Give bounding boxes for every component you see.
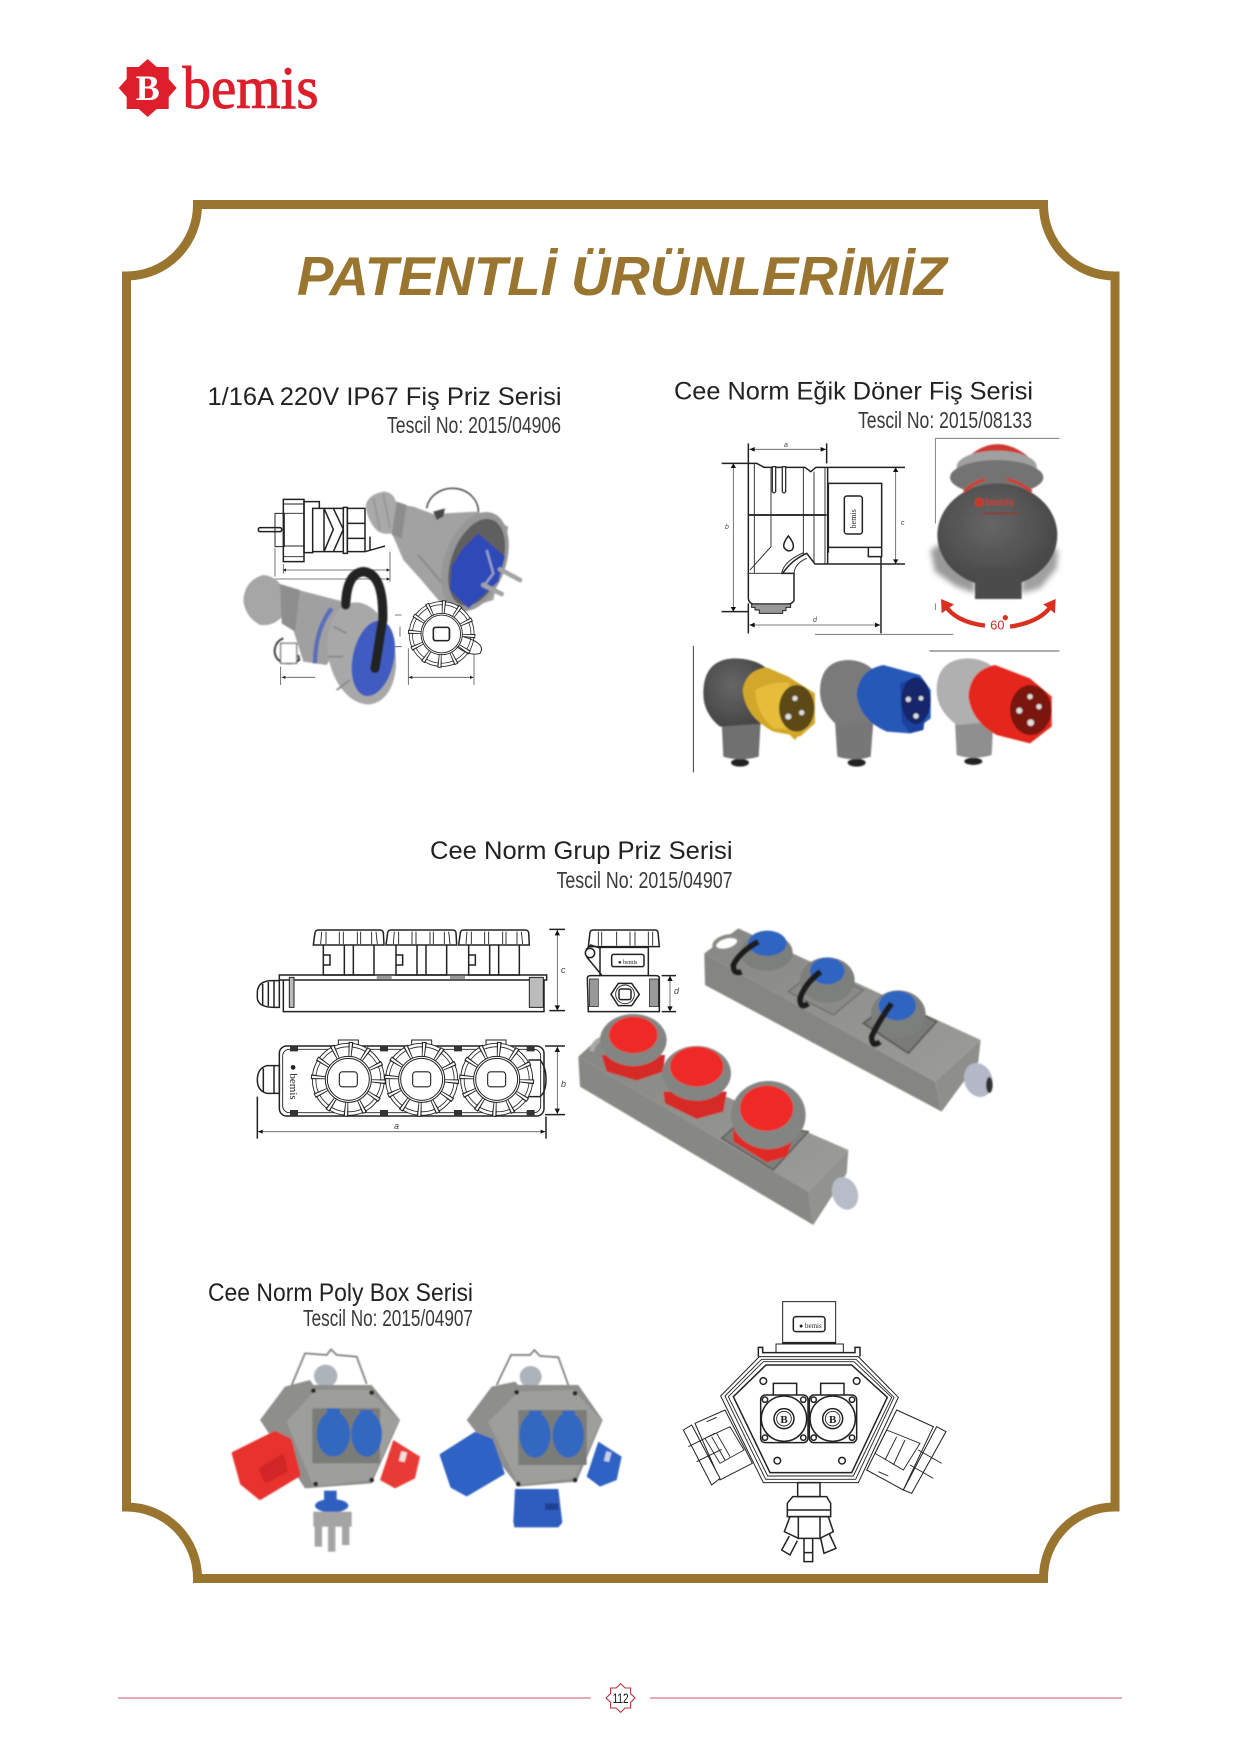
heading: series name and registration (430, 837, 732, 893)
dimension and brand labels on the drawing: c (561, 965, 566, 975)
dimension labels: c (901, 520, 905, 527)
dimension and brand labels on the drawing (287, 960, 680, 1131)
photo: rotating plug rear view with 60 degree arc: bemis (985, 498, 1015, 509)
heading: series name and registration: Tescil No: 2015/04906 (387, 412, 561, 438)
photo: grey plug with blue insert (366, 488, 521, 621)
brand labels on the drawing: ● bemis (799, 1322, 822, 1330)
panel: 1/16A 220V IP67 plug and socket series (208, 383, 562, 711)
photo: poly box with blue side sockets (441, 1350, 622, 1527)
technical drawing: poly box front view (683, 1302, 946, 1562)
technical drawing: angled plug with dimensions: bemis (849, 509, 858, 528)
icon: red eight-point star with B: B (136, 68, 160, 108)
panel: Cee Norm poly box series (208, 1279, 946, 1562)
dimension and brand labels on the drawing: b (561, 1079, 566, 1089)
dimension labels: b (725, 524, 729, 531)
technical drawing: plug side view (258, 499, 390, 582)
footer rule right (650, 1697, 1122, 1699)
heading: series name and registration: Tescil No: 2015/04907 (303, 1305, 473, 1331)
dimension and brand labels on the drawing: a (394, 1121, 399, 1131)
heading: series name and registration: Tescil No: 2015/08133 (858, 407, 1032, 433)
photo: grey box with blue sockets (704, 928, 997, 1112)
brand labels on the drawing: B (780, 1414, 788, 1426)
logo: bemis (119, 55, 318, 121)
yellow plug (703, 658, 815, 767)
panel: Cee Norm angled rotating plug series (674, 378, 1059, 772)
technical drawing: end view (585, 930, 676, 1012)
brand labels on the drawing: B (829, 1414, 837, 1426)
page number badge (606, 1684, 635, 1712)
page number badge: 112 (613, 1690, 629, 1706)
dimension labels: a (784, 442, 788, 449)
technical drawing: side and top views (257, 929, 565, 1139)
technical drawing: angled plug with dimensions (722, 443, 953, 634)
photo: rotating plug rear view with 60 degree arc: 60 (990, 618, 1004, 632)
logo wordmark: bemis (182, 55, 318, 121)
photo: poly box with red side sockets (233, 1349, 420, 1552)
dimension and brand labels on the drawing: ● bemis (618, 960, 638, 966)
photo: grey socket with blue cover and black strap (243, 572, 405, 711)
brand labels on the drawing (780, 1322, 837, 1426)
footer with page number (118, 1684, 1122, 1712)
heading: series name and registration (208, 1279, 473, 1331)
red plug (937, 658, 1052, 765)
footer rule left (118, 1697, 591, 1699)
heading: series name and registration (674, 378, 1033, 433)
dimension and brand labels on the drawing: d (674, 986, 680, 996)
technical drawing: end view gear with dimensions (281, 602, 481, 685)
dimension labels: d (813, 617, 818, 624)
heading: series name and registration: Tescil No: 2015/04907 (556, 867, 732, 893)
decorative gold frame (126, 204, 1115, 1578)
heading: series name and registration: Cee Norm Poly Box Serisi (208, 1279, 473, 1307)
heading: series name and registration: Cee Norm Grup Priz Serisi (430, 837, 732, 865)
photo: yellow, blue and red plugs (693, 646, 1059, 772)
photo: rotating plug rear view with 60 degree arc (931, 438, 1059, 632)
title: PATENTLİ ÜRÜNLERİMİZ (297, 245, 949, 307)
icon: red eight-point star with B (119, 59, 177, 117)
blue plug (820, 660, 931, 767)
heading: series name and registration: 1/16A 220V IP67 Fiş Priz Serisi (208, 383, 562, 411)
dimension and brand labels on the drawing: ● bemis (287, 1064, 299, 1100)
panel: Cee Norm group socket series (257, 837, 997, 1225)
heading: series name and registration (208, 383, 562, 438)
heading: series name and registration: Cee Norm Eğik Döner Fiş Serisi (674, 378, 1033, 406)
photo: grey box with red sockets (578, 1014, 863, 1225)
dimension labels (725, 442, 905, 624)
